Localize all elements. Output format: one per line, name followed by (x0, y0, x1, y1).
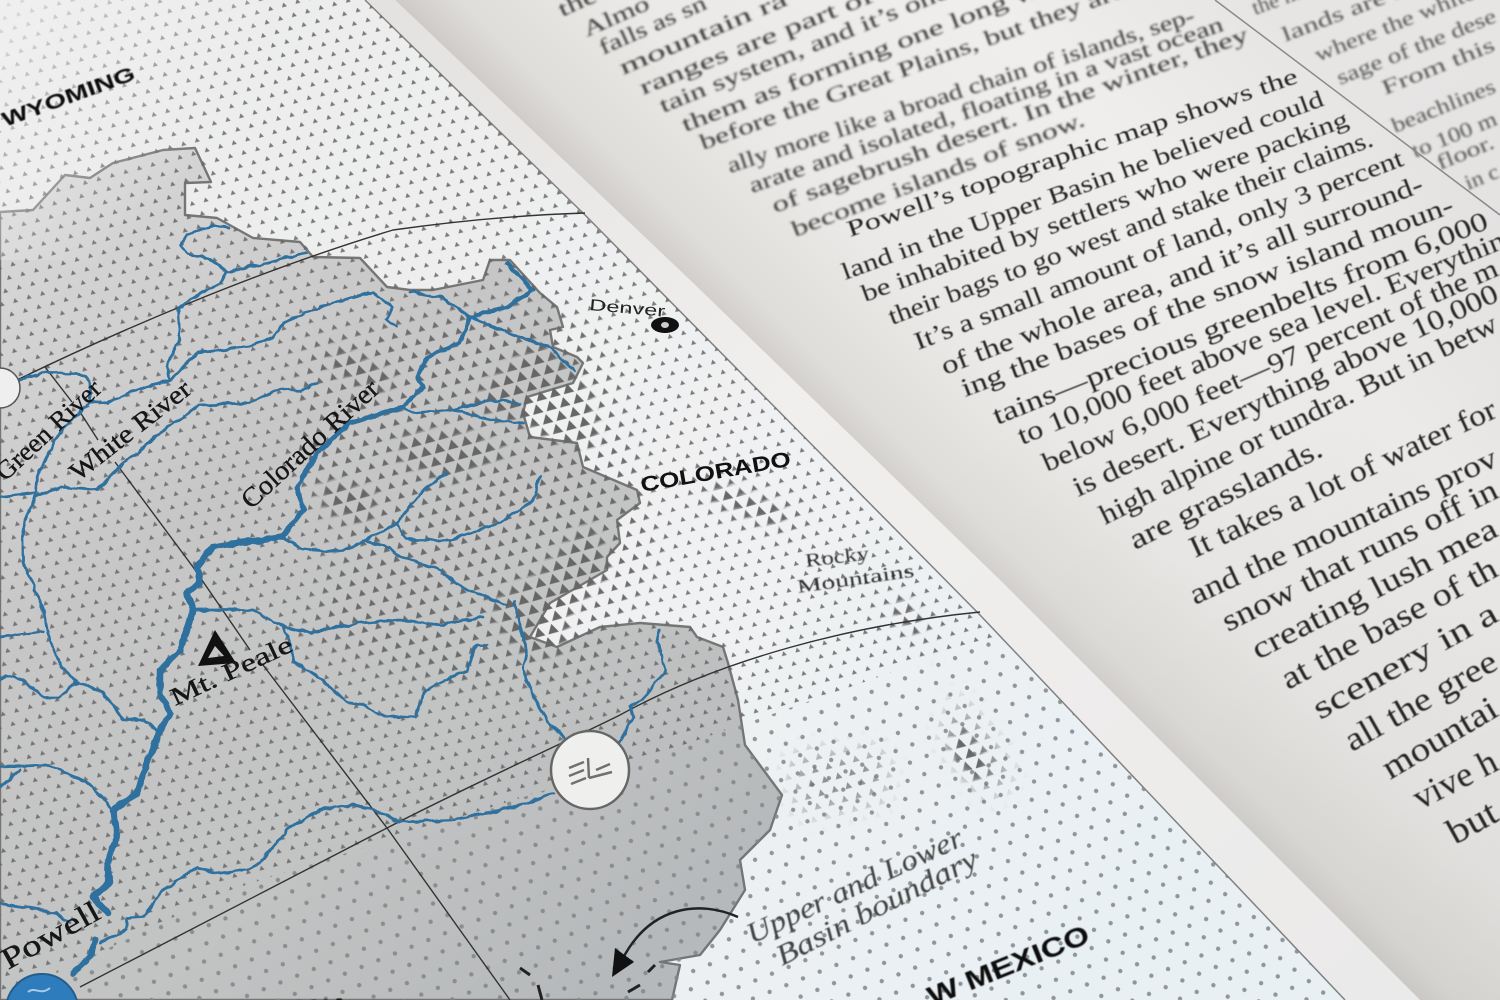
text block: main column in focus: tains—precious greenbelts from 6,000 (988, 206, 1492, 431)
text block: right column fragments: From this (1378, 32, 1498, 100)
icon: Mt. Peale triangle (198, 630, 236, 666)
state labels: COLORADO (639, 448, 793, 497)
Rocky Mountains label: Mountains (796, 561, 916, 598)
text block: far column, blurred top lines: falls as sn (595, 0, 710, 60)
map: upper basin fill with boundary (0, 148, 782, 1000)
text block: main column in focus: high alpine or tundra. But in betw (1094, 308, 1500, 531)
text block: right column fragments: sage of the dese (1333, 4, 1499, 90)
text block: right column fragments: in c (1461, 159, 1500, 195)
text block: far column, blurred top lines: become islands of snow. (788, 107, 1088, 242)
text block: main column in focus: It’s a small amount of land, only 3 percent (911, 145, 1407, 356)
text block: main column in focus: vive h (1406, 741, 1500, 817)
text block: main column in focus: creating lush mea (1245, 510, 1500, 666)
text block: main column in focus: It takes a lot of water for (1184, 393, 1500, 564)
text block: main column in focus: but (1439, 792, 1500, 852)
text block: main column in focus: and the mountains prov (1184, 441, 1500, 611)
text block: far column, blurred top lines: mountain ra (615, 0, 791, 80)
text block: far column, blurred top lines: ally more like a broad chain of islands, sep- (724, 3, 1198, 178)
text block: right column fragments: floor. (1433, 130, 1498, 175)
text block: main column in focus: scenery in a (1306, 595, 1500, 727)
icon: small reservoir circle (0, 368, 20, 408)
Rocky Mountains label: Rocky (804, 543, 871, 572)
text block: right column fragments: beachlines (1388, 74, 1499, 138)
text block: main column in focus: is desert. Everything above 10,000 (1068, 278, 1500, 503)
icon: dam circle (551, 731, 629, 809)
text block: main column in focus: all the gree (1338, 644, 1500, 759)
icon: Lake Powell blue circle (6, 974, 78, 1000)
text block: main column in focus: be inhabited by settlers who were packing (858, 107, 1352, 308)
Denver label and city dot: Denver (589, 297, 667, 321)
text block: main column in focus: their bags to go west and stake their claims. (885, 126, 1377, 331)
text block: far column, blurred top lines: of sagebrush desert. In the winter, they (768, 21, 1251, 218)
text block: main column in focus: snow that runs off in (1216, 471, 1500, 638)
text block: main column in focus (838, 63, 1500, 852)
text block: far column, blurred top lines: ranges are part of (636, 0, 878, 100)
Upper and Lower Basin boundary label: Basin boundary (771, 843, 983, 972)
river and peak labels: Mt. Peale (166, 631, 297, 711)
arrow to basin boundary (520, 908, 738, 1000)
text block: main column in focus: ing the bases of the snow island moun- (957, 190, 1457, 403)
text block: main column in focus: of the whole area, and it’s all surround- (937, 169, 1427, 381)
river and peak labels: Colorado River (235, 373, 385, 514)
text block: main column in focus: below 6,000 feet—97 percent of the m (1037, 253, 1500, 478)
text block: main column in focus: at the base of th (1274, 550, 1500, 696)
text block: far column, blurred top lines: them as forming one long wa (678, 0, 1056, 137)
text block: far column, blurred top lines (554, 0, 1251, 242)
Upper and Lower Basin boundary label (741, 822, 983, 972)
state labels: WYOMING (0, 63, 138, 132)
Rocky Mountains label (796, 543, 916, 598)
text block: main column in focus: to 10,000 feet above sea level. Everything (1013, 219, 1500, 451)
text block: far column, blurred top lines: tain system, and it’s one (656, 0, 952, 118)
text block: main column in focus: mountai (1375, 690, 1500, 787)
text block: main column in focus: are grasslands. (1124, 433, 1328, 556)
text block: right column fragments (1215, 0, 1500, 215)
Upper and Lower Basin boundary label: Upper and Lower (741, 822, 969, 950)
river and peak labels: White River (64, 374, 197, 487)
text block: far column, blurred top lines: arate and isolated, floating in a vast ocean (745, 11, 1226, 198)
text block: main column in focus: Powell’s topographic map shows the (843, 63, 1301, 242)
state labels (0, 63, 1094, 1000)
text block: far column, blurred top lines: before the Great Plains, but they are (696, 0, 1128, 155)
map: Colorado River main stem (73, 263, 533, 973)
text block: right column fragments: to 100 m (1408, 107, 1500, 163)
text block: main column in focus: land in the Upper Basin he believed could (838, 86, 1327, 286)
river and peak labels (0, 373, 385, 976)
Denver label and city dot (589, 297, 679, 333)
map: graticule lines (17, 213, 980, 1000)
map: Colorado River tributaries (0, 225, 665, 943)
